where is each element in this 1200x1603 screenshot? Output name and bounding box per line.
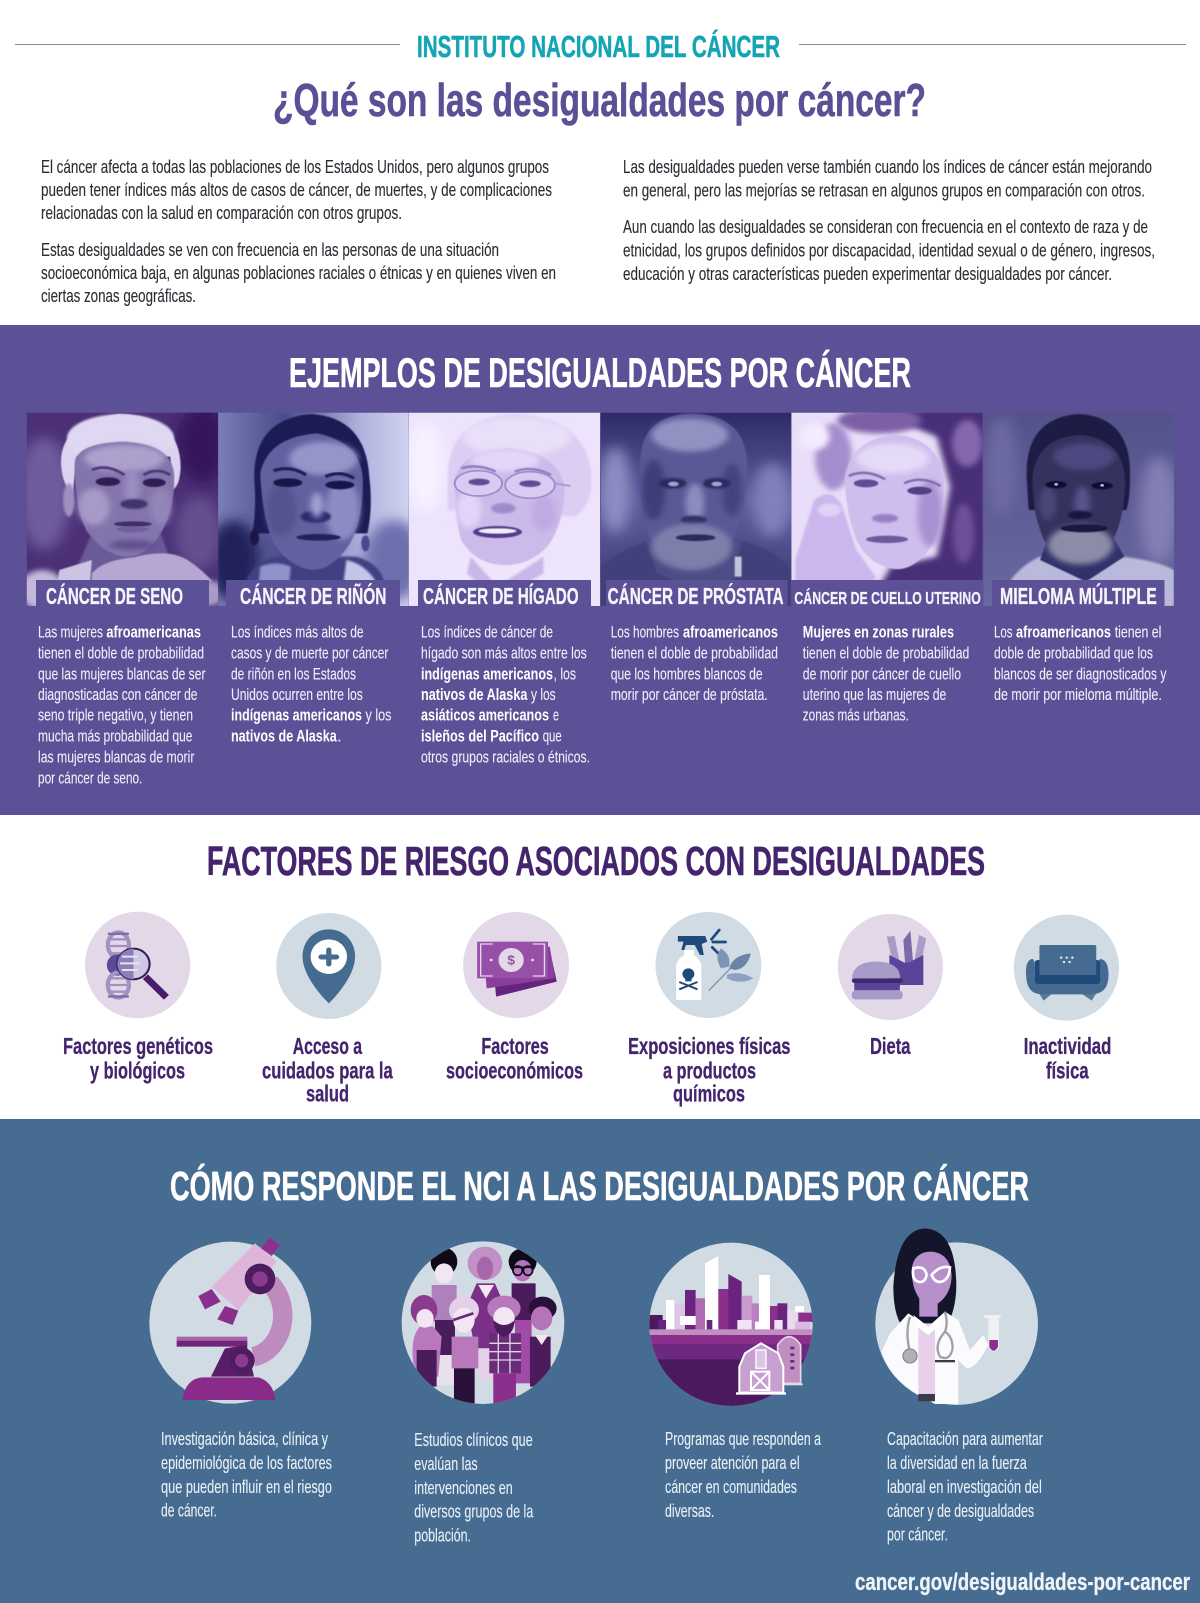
- intro text: left column: Estas desigualdades se ven con frecuencia en las personas de una situación: [41, 239, 499, 260]
- icon: city and farm: [647, 1243, 817, 1408]
- label: genéticos: y biológicos: [90, 1057, 185, 1083]
- body text: mieloma: afroamericanos: [1016, 622, 1111, 641]
- factor: inactividad: [1014, 915, 1119, 1083]
- factor: dieta: [838, 914, 943, 1059]
- response: capacitación: [875, 1228, 1043, 1545]
- label: cáncer de seno: CÁNCER DE SENO: [46, 582, 183, 609]
- text: capacitación: [887, 1429, 1043, 1545]
- portrait 3: [406, 413, 600, 607]
- body text: hígado: [421, 622, 590, 766]
- body text: próstata: [611, 622, 778, 704]
- label: cáncer de cuello uterino: CÁNCER DE CUELLO UTERINO: [794, 587, 981, 608]
- portrait 5: [791, 407, 990, 613]
- body text: seno: tienen el doble de probabilidad: [38, 643, 204, 662]
- text: estudios clínicos: intervenciones en: [414, 1478, 513, 1498]
- text: capacitación: laboral en investigación del: [887, 1477, 1042, 1497]
- body text: hígado: que: [543, 727, 562, 746]
- body text: riñón: de riñón en los Estados: [231, 664, 356, 683]
- body text: riñón: [231, 622, 392, 746]
- body text: hígado: , los: [554, 664, 576, 683]
- icon: DNA and magnifier: [85, 912, 190, 1018]
- body text: hígado: isleños del Pacífico: [421, 727, 539, 746]
- label: inactividad: Inactividad: [1024, 1033, 1111, 1059]
- icon: location pin: [276, 913, 381, 1019]
- icon: microscope: [149, 1237, 311, 1404]
- body text: seno: afroamericanas: [106, 622, 201, 641]
- body text: próstata: morir por cáncer de próstata.: [611, 685, 768, 704]
- text: estudios clínicos: diversos grupos de la: [414, 1502, 534, 1522]
- text: programas: [665, 1429, 822, 1521]
- label: exposiciones: químicos: [673, 1081, 745, 1107]
- intro text: left column: El cáncer afecta a todas las poblaciones de los Estados Unidos, pero algunos grupos: [41, 156, 549, 177]
- label: acceso: Acceso a: [293, 1033, 362, 1059]
- text: estudios clínicos: población.: [414, 1526, 471, 1546]
- body text: próstata: que los hombres blancos de: [611, 664, 763, 683]
- body text: hígado: Los índices de cáncer de: [421, 622, 553, 641]
- portrait 1: [26, 412, 218, 606]
- icon: spray bottle and leaves: [655, 912, 761, 1018]
- body text: mieloma: tienen el: [1115, 622, 1161, 641]
- portrait 6: [983, 413, 1178, 607]
- text: programas: Programas que responden a: [665, 1429, 822, 1449]
- body text: hígado: hígado son más altos entre los: [421, 643, 587, 662]
- response: programas: [647, 1243, 822, 1521]
- body text: riñón: y los: [366, 706, 392, 725]
- label: cáncer de próstata: CÁNCER DE PRÓSTATA: [608, 582, 784, 609]
- card: cáncer de seno: [26, 412, 218, 787]
- text: capacitación: la diversidad en la fuerza: [887, 1453, 1027, 1473]
- body text: mieloma: Los: [994, 622, 1012, 641]
- factor: acceso a cuidados: [262, 913, 393, 1107]
- body text: hígado: asiáticos americanos: [421, 706, 549, 725]
- body text: riñón: Los índices más altos de: [231, 622, 364, 641]
- main title: ¿Qué son las desigualdades por cáncer?: [273, 74, 926, 126]
- text: investigación: epidemiológica de los factores: [161, 1453, 332, 1473]
- body text: próstata: tienen el doble de probabilidad: [611, 643, 778, 662]
- body text: riñón: .: [337, 727, 342, 746]
- icon: banknotes: [463, 912, 569, 1018]
- text: programas: cáncer en comunidades: [665, 1477, 797, 1497]
- card: mieloma múltiple: [983, 413, 1178, 704]
- label: cáncer de hígado: [418, 580, 591, 609]
- text: capacitación: Capacitación para aumentar: [887, 1429, 1043, 1449]
- intro text: left column: [41, 156, 556, 306]
- intro text: left column: socioeconómica baja, en algunas poblaciones raciales o étnicas y en quienes viven en: [41, 262, 556, 283]
- body text: seno: mucha más probabilidad que: [38, 727, 192, 746]
- body text: seno: Las mujeres: [38, 622, 103, 641]
- text: capacitación: por cáncer.: [887, 1525, 948, 1545]
- intro text: left column: pueden tener índices más altos de casos de cáncer, de muertes, y de complicaciones: [41, 179, 552, 200]
- body text: hígado: nativos de Alaska: [421, 685, 528, 704]
- text: programas: proveer atención para el: [665, 1453, 800, 1473]
- factor: socioeconómicos: [446, 912, 583, 1083]
- text: estudios clínicos: [414, 1430, 534, 1546]
- text: capacitación: cáncer y de desigualdades: [887, 1501, 1034, 1521]
- body text: cuello uterino: tienen el doble de probabilidad: [803, 643, 969, 662]
- body text: riñón: nativos de Alaska: [231, 727, 337, 746]
- response: investigación: [149, 1237, 332, 1521]
- body text: seno: por cáncer de seno.: [38, 768, 142, 787]
- label: exposiciones: a productos: [663, 1057, 756, 1083]
- intro text: right column: [623, 156, 1155, 284]
- card: cáncer de cuello uterino: [791, 407, 990, 725]
- text: investigación: Investigación básica, clínica y: [161, 1429, 328, 1449]
- body text: cuello uterino: zonas más urbanas.: [803, 706, 909, 725]
- intro text: left column: relacionadas con la salud en comparación con otros grupos.: [41, 202, 402, 223]
- body text: cuello uterino: Mujeres en zonas rurales: [803, 622, 954, 641]
- text: estudios clínicos: evalúan las: [414, 1454, 478, 1474]
- icon: scientist: [875, 1228, 1038, 1405]
- body text: hígado: y los: [531, 685, 556, 704]
- label: acceso: [262, 1033, 393, 1107]
- body text: cuello uterino: de morir por cáncer de cuello: [803, 664, 961, 683]
- label: cáncer de próstata: [606, 580, 788, 609]
- card: cáncer de hígado: [406, 413, 600, 766]
- portrait 2: [218, 412, 409, 606]
- body text: riñón: casos y de muerte por cáncer: [231, 643, 389, 662]
- body text: seno: seno triple negativo, y tienen: [38, 706, 193, 725]
- label: cáncer de hígado: CÁNCER DE HÍGADO: [423, 582, 579, 609]
- label: cáncer de seno: [36, 580, 209, 609]
- text: investigación: que pueden influir en el riesgo: [161, 1477, 332, 1497]
- label: genéticos: Factores genéticos: [63, 1033, 213, 1059]
- label: inactividad: [1024, 1033, 1111, 1083]
- label: inactividad: física: [1046, 1057, 1089, 1083]
- body text: riñón: indígenas americanos: [231, 706, 362, 725]
- body text: seno: [38, 622, 206, 787]
- body text: cuello uterino: [803, 622, 969, 725]
- label: cáncer de riñón: CÁNCER DE RIÑÓN: [240, 582, 386, 609]
- label: exposiciones: [628, 1033, 790, 1107]
- text: programas: diversas.: [665, 1501, 714, 1521]
- body text: hígado: indígenas americanos: [421, 664, 553, 683]
- body text: riñón: Unidos ocurren entre los: [231, 685, 363, 704]
- body text: seno: diagnosticadas con cáncer de: [38, 685, 198, 704]
- body text: seno: que las mujeres blancas de ser: [38, 664, 206, 683]
- text: estudios clínicos: Estudios clínicos que: [414, 1430, 533, 1450]
- body text: próstata: afroamericanos: [683, 622, 778, 641]
- label: socioeconómicos: socioeconómicos: [446, 1057, 583, 1083]
- factor: genéticos y biológicos: [63, 912, 213, 1083]
- icon: group of people: [402, 1241, 564, 1407]
- header section: [15, 29, 1186, 126]
- label: cáncer de cuello uterino: [791, 580, 983, 608]
- body text: hígado: otros grupos raciales o étnicos.: [421, 747, 590, 766]
- card: cáncer de próstata: [600, 413, 791, 704]
- response: estudios clínicos: [402, 1241, 564, 1546]
- label: dieta: Dieta: [870, 1033, 911, 1059]
- organization name: INSTITUTO NACIONAL DEL CÁNCER: [417, 29, 780, 64]
- icon: burger and fries: [838, 914, 943, 1020]
- intro text: left column: ciertas zonas geográficas.: [41, 285, 196, 306]
- label: cáncer de riñón: [226, 580, 400, 609]
- text: investigación: [161, 1429, 332, 1521]
- panel: ejemplos de desigualdades: [0, 325, 1200, 815]
- body text: hígado: e: [553, 706, 559, 725]
- label: socioeconómicos: [446, 1033, 583, 1083]
- body text: próstata: Los hombres: [611, 622, 679, 641]
- body text: mieloma: [994, 622, 1167, 704]
- text: investigación: de cáncer.: [161, 1501, 217, 1521]
- label: socioeconómicos: Factores: [481, 1033, 549, 1059]
- portrait 4: [600, 413, 791, 607]
- card: cáncer de riñón: [218, 412, 409, 742]
- panel: cómo responde el NCI: [0, 1119, 1200, 1603]
- icon: couch: [1014, 915, 1119, 1021]
- label: acceso: salud: [306, 1081, 349, 1107]
- label: acceso: cuidados para la: [262, 1057, 393, 1083]
- panel: factores de riesgo: [63, 838, 1119, 1107]
- body text: cuello uterino: uterino que las mujeres de: [803, 685, 946, 704]
- factor: exposiciones: [628, 912, 790, 1107]
- label: exposiciones: Exposiciones físicas: [628, 1033, 790, 1059]
- label: genéticos: [63, 1033, 213, 1083]
- body text: seno: las mujeres blancas de morir: [38, 747, 195, 766]
- icon: banknotes: $: [507, 953, 516, 968]
